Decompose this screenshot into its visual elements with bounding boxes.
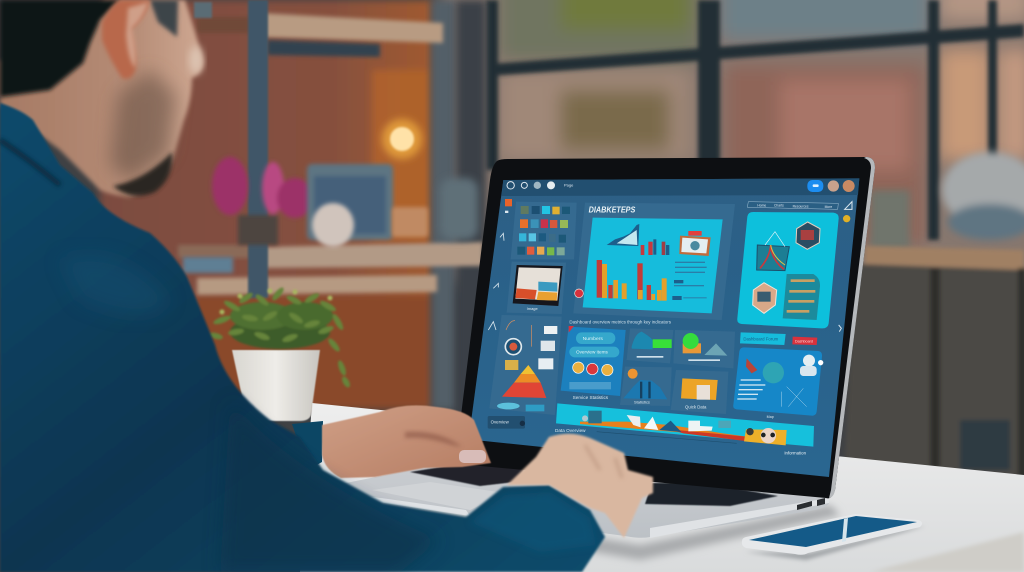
hair [0,0,120,97]
bottom left search box [488,416,525,429]
small peach box [392,207,428,237]
panel: blue pills card: Service Statistics [573,395,609,400]
laptop screen dashboard [469,178,859,477]
panel: pyramid chart [489,315,562,415]
keyboard left part [410,459,530,486]
trackpad [372,482,505,510]
panel: blue pills card [561,326,626,400]
shirt shoulder highlight [60,255,170,315]
caption under astronaut card: Map [767,415,774,419]
card: green circle illustration [673,330,735,368]
potted plant [208,286,352,421]
right arrow [839,325,841,332]
timeline caption: Data Overview [555,428,586,433]
screen display [469,178,859,477]
panel: blue pills card: Numbers [583,336,603,342]
shirt body and sleeve [0,103,605,572]
blurred tablet on shelf [307,164,393,240]
window panes [440,0,1024,280]
banner illustration [556,403,814,447]
panel: main dashboard [573,203,735,320]
left hand [322,405,491,478]
cyan button: Dashboard Forum [743,337,779,342]
beard [113,152,172,196]
hexagon illustration [753,283,777,313]
green foliage [208,286,352,389]
shelving unit [178,0,486,420]
heading: DIABKETEPS [589,204,636,214]
panel: right infographic: Home [757,204,766,208]
laptop lid bezel [458,157,875,498]
laptop base deck [341,466,829,538]
front hair near temple [150,0,178,37]
bottom left search box: Overview [491,420,510,425]
panel: thumbnail preview [507,262,566,314]
desk surface [300,403,1024,572]
phone on desk [742,514,926,560]
side logo [505,199,512,213]
panel: right infographic: More [825,205,832,209]
panel: blue pills card: Overview items [576,350,608,355]
icon: glowing lamp [382,119,422,159]
panel: right infographic: Charts [774,204,784,208]
knuckle shadows [585,445,622,478]
timeline track [597,432,737,443]
grey vase on shelf [440,178,478,240]
shirt collar fold [0,140,60,185]
section caption: Dashboard overview metrics through key indicators [569,319,671,324]
top toolbar: Page [564,183,574,188]
bottom right caption: Information [784,450,807,455]
clipboard illustration [679,231,711,256]
panel: blue astronaut card [733,347,823,416]
mini area chart [607,224,639,246]
cyan button [740,332,786,345]
window frames [486,0,1024,240]
back wall [100,0,432,410]
top toolbar [502,178,859,196]
desk front shade [870,532,1024,572]
phone screen [749,516,917,547]
phone screen reflection [842,518,848,542]
mini bar chart [641,239,669,255]
phone body [742,514,922,555]
bar chart [597,260,667,301]
left thumb nail [459,450,486,463]
right hand [507,434,653,538]
inner ear highlight [126,2,148,68]
right wooden counter and cabinet [845,246,1024,480]
panel: right infographic [737,202,852,328]
ear [102,0,150,79]
card: yellow picture [671,370,728,414]
sleeve shadow [220,400,440,572]
sidebar arrows [488,233,504,330]
laptop shadow on desk [345,495,840,560]
white plant pot [232,350,320,421]
card: blue mountain chart: Statistics [634,399,650,404]
red button: Dashboard [795,340,813,344]
finger gap [405,432,462,447]
laptop front edge highlight [345,493,829,538]
panel: icon grid [511,202,577,259]
usb ports [797,498,825,510]
cyan chart card [583,218,723,313]
card: blue mountain chart [620,367,672,406]
panel: right infographic: Resources [793,204,809,208]
neck and face [0,0,203,197]
white bowl [870,152,1024,250]
keyboard right part [645,483,778,506]
nose highlight [189,46,203,74]
panel: thumbnail preview: Image [527,306,539,311]
left shirt cuff [292,421,323,470]
triangle chart [757,232,789,271]
phone shadow [745,526,926,560]
red badge [575,289,583,298]
sleeve highlight [470,492,596,552]
magenta flowers [212,157,313,245]
cheek stubble shadow [110,70,176,180]
person from behind [0,0,653,572]
card: yellow picture: Quick Data [685,405,707,410]
chart side notes [672,262,707,300]
laptop [341,157,875,560]
hexagon badge [796,222,820,249]
card: green chart [627,328,673,363]
round white vase [312,203,354,247]
teal list card [783,274,820,320]
red button [792,337,817,345]
lid silver rim [829,157,875,498]
glasses arm [194,2,212,18]
